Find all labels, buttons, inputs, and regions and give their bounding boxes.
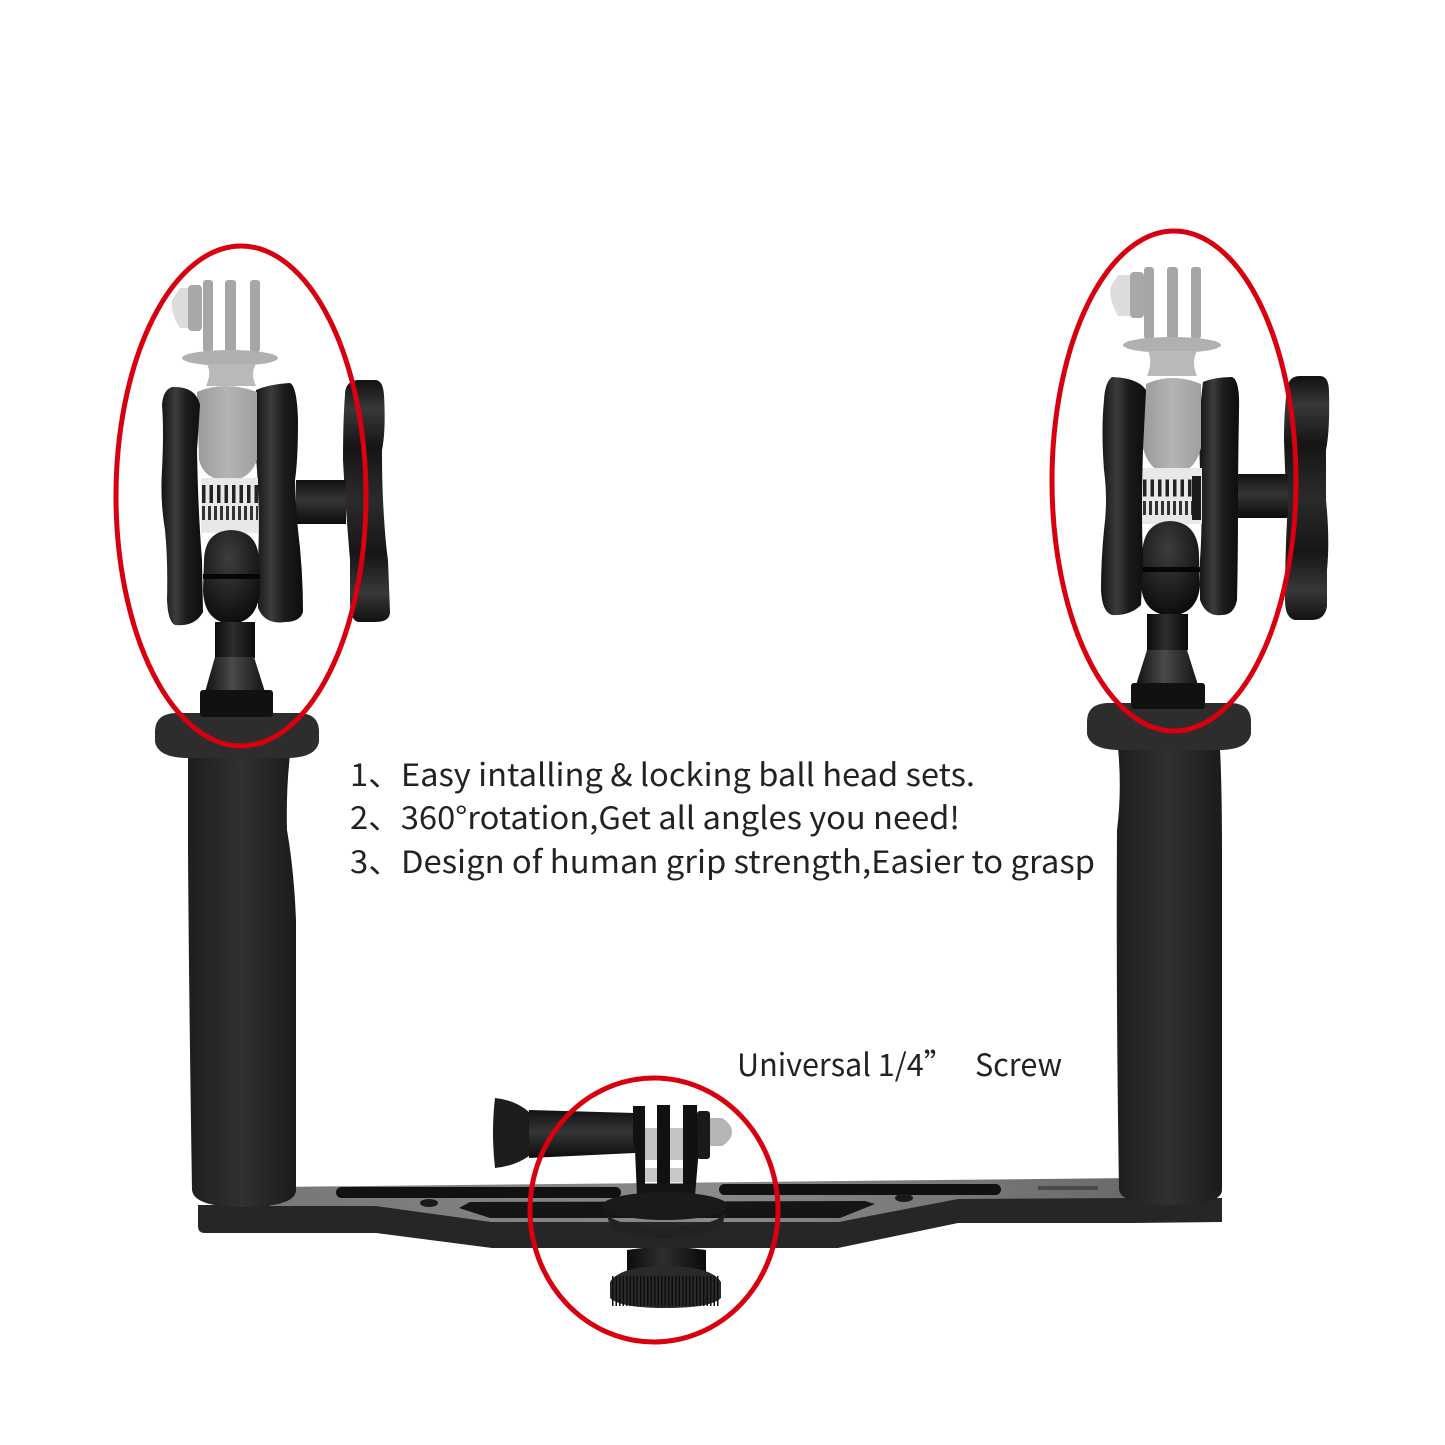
feature 2: 2、360°rotation,Get all angles you need! xyxy=(350,793,960,838)
engraved brand mark xyxy=(1038,1186,1098,1190)
thumb screw head xyxy=(493,1098,529,1168)
knurled knob xyxy=(610,1266,721,1308)
feature 3: 3、Design of human grip strength,Easier to grasp xyxy=(350,837,1095,882)
thumb screw shaft xyxy=(529,1110,635,1158)
right ball head set xyxy=(1101,267,1329,709)
gopro prong 3 xyxy=(250,280,260,352)
black ball xyxy=(203,530,260,624)
gopro prong 2 xyxy=(225,280,236,352)
knob knurling xyxy=(612,1276,719,1306)
collar xyxy=(1131,683,1205,709)
neck xyxy=(206,364,256,386)
red circle: right ball head xyxy=(1052,231,1296,731)
slot: lower xyxy=(459,1201,875,1218)
far clamp plate xyxy=(343,380,390,622)
left handle grip xyxy=(155,713,319,1207)
gopro disc xyxy=(182,350,278,366)
spring coils upper xyxy=(202,485,258,503)
stem xyxy=(1147,614,1188,650)
feature list xyxy=(350,750,1095,882)
screw hole left xyxy=(420,1199,438,1207)
right handle grip xyxy=(1087,703,1251,1205)
gopro prong 2 xyxy=(1167,267,1178,339)
gray ball xyxy=(1143,378,1201,474)
gopro nut xyxy=(188,285,202,331)
silver bolt xyxy=(708,1118,732,1146)
screw hole right xyxy=(895,1194,913,1202)
near clamp left plate xyxy=(161,387,203,625)
ball groove xyxy=(203,574,260,579)
gopro bolt xyxy=(172,288,197,328)
prong 3 xyxy=(683,1105,698,1196)
gopro bolt xyxy=(1110,275,1135,316)
silver spacers lower xyxy=(645,1168,685,1182)
mount base xyxy=(637,1184,695,1205)
spring background xyxy=(1142,468,1202,524)
bottom mount with thumb screw and knob xyxy=(493,1098,732,1308)
connecting arm xyxy=(296,480,346,524)
prong 2 xyxy=(657,1105,670,1197)
gopro prong 1 xyxy=(1144,267,1154,339)
near clamp right plate xyxy=(255,383,303,622)
spring background xyxy=(201,478,258,533)
base plate xyxy=(198,1178,1222,1248)
slot: upper right xyxy=(719,1184,1001,1195)
collar xyxy=(200,690,273,717)
spring bolt end xyxy=(1192,476,1201,520)
disc base xyxy=(606,1212,726,1238)
gray ball xyxy=(197,386,257,481)
screw label: Universal 1/4” Screw xyxy=(737,1040,1062,1085)
far clamp plate xyxy=(1284,376,1329,620)
gopro nut xyxy=(1130,272,1144,318)
ball groove xyxy=(1142,567,1200,572)
mount disc xyxy=(602,1192,728,1220)
black ball xyxy=(1141,521,1200,616)
gopro prong 3 xyxy=(1191,267,1201,339)
left ball head set xyxy=(161,280,390,717)
spring coils lower xyxy=(1143,501,1192,515)
connecting arm xyxy=(1238,474,1288,518)
cone xyxy=(205,657,265,692)
neck xyxy=(1147,351,1197,376)
prong 1 xyxy=(633,1106,645,1196)
red circle: bottom screw mount xyxy=(530,1078,778,1342)
gopro disc xyxy=(1123,337,1221,353)
stem xyxy=(215,622,255,658)
silver spacers upper xyxy=(645,1128,685,1160)
spring coils upper xyxy=(1143,480,1192,496)
red circle: left ball head xyxy=(116,246,366,746)
near clamp right plate xyxy=(1199,377,1239,615)
nut xyxy=(697,1111,710,1159)
feature 1: 1、Easy intalling & locking ball head sets. xyxy=(350,750,975,795)
near clamp left plate xyxy=(1101,377,1146,615)
slot: upper left xyxy=(336,1187,621,1198)
spring coils lower xyxy=(202,506,258,520)
gopro prong 1 xyxy=(203,280,213,352)
knob neck xyxy=(627,1247,706,1275)
cone xyxy=(1136,650,1198,685)
